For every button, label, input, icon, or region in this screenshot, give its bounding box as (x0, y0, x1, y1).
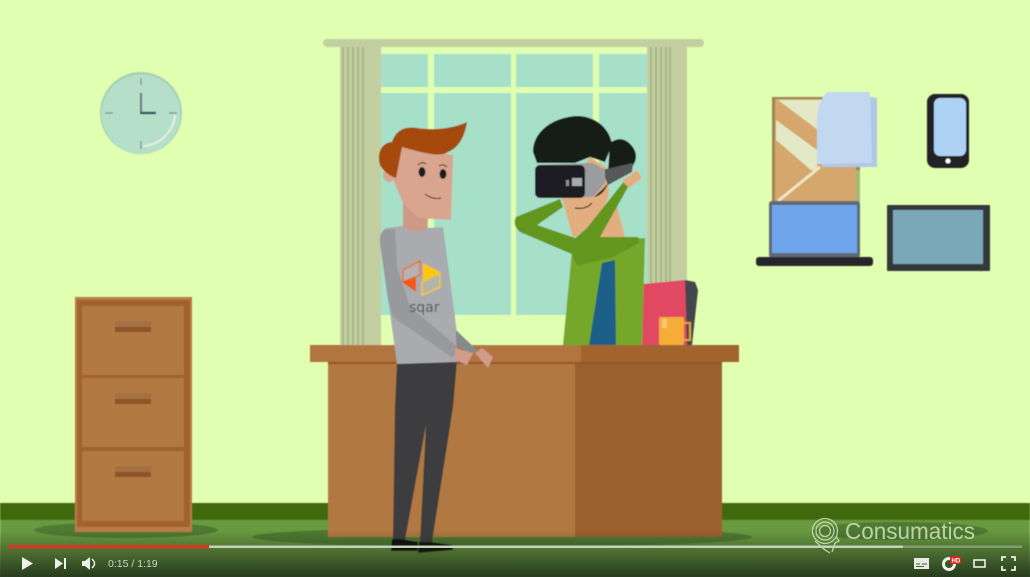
tablet (887, 205, 990, 271)
left curtain (340, 47, 381, 345)
laptop (756, 201, 873, 266)
Consumatics watermark: Consumatics (845, 518, 975, 544)
right curtain (647, 47, 687, 345)
fullscreen icon (1002, 557, 1015, 570)
player controls left (22, 557, 158, 570)
smile (575, 203, 592, 208)
hair bun (608, 139, 636, 172)
next icon (55, 558, 66, 569)
play icon (22, 557, 33, 570)
baseboard (0, 503, 1030, 521)
time label: 0:15 / 1:19 (108, 558, 158, 570)
settings icon: HD (952, 558, 961, 564)
face and neck (562, 157, 609, 238)
mug (659, 317, 690, 345)
hands (455, 348, 493, 368)
woman with VR headset (515, 116, 645, 345)
neck (403, 200, 428, 238)
curtain rod (323, 39, 704, 47)
filing cabinet (75, 297, 192, 532)
desk (310, 345, 739, 537)
VR headset (535, 163, 633, 198)
ear (383, 168, 395, 182)
trousers (393, 361, 457, 542)
cork board and paper (772, 92, 877, 202)
floor (0, 520, 1030, 577)
coat (563, 238, 645, 345)
player controls right (914, 556, 1015, 570)
floor shadows (34, 522, 988, 547)
shoes (391, 539, 453, 553)
sqar logo: sqar (409, 300, 440, 316)
blue shirt (589, 260, 616, 345)
arms (515, 180, 639, 266)
head (392, 147, 453, 220)
face details (418, 163, 447, 198)
theater icon (974, 560, 985, 567)
sleeve (380, 229, 458, 358)
captions icon (914, 558, 929, 569)
sqar logo (402, 261, 440, 316)
progress bar (8, 545, 1022, 548)
drawer handles (115, 321, 151, 477)
hair (379, 122, 467, 178)
player gradient overlay (0, 530, 1030, 577)
wall clock (100, 72, 182, 154)
hand (622, 170, 642, 188)
volume icon (82, 557, 94, 570)
hair (533, 116, 612, 163)
smartphone (927, 94, 969, 168)
watermark logo (812, 518, 839, 553)
red book (642, 280, 698, 345)
Consumatics watermark (812, 518, 975, 553)
sweatshirt (380, 226, 457, 364)
man in sqar sweatshirt (379, 122, 493, 553)
window (323, 39, 704, 345)
